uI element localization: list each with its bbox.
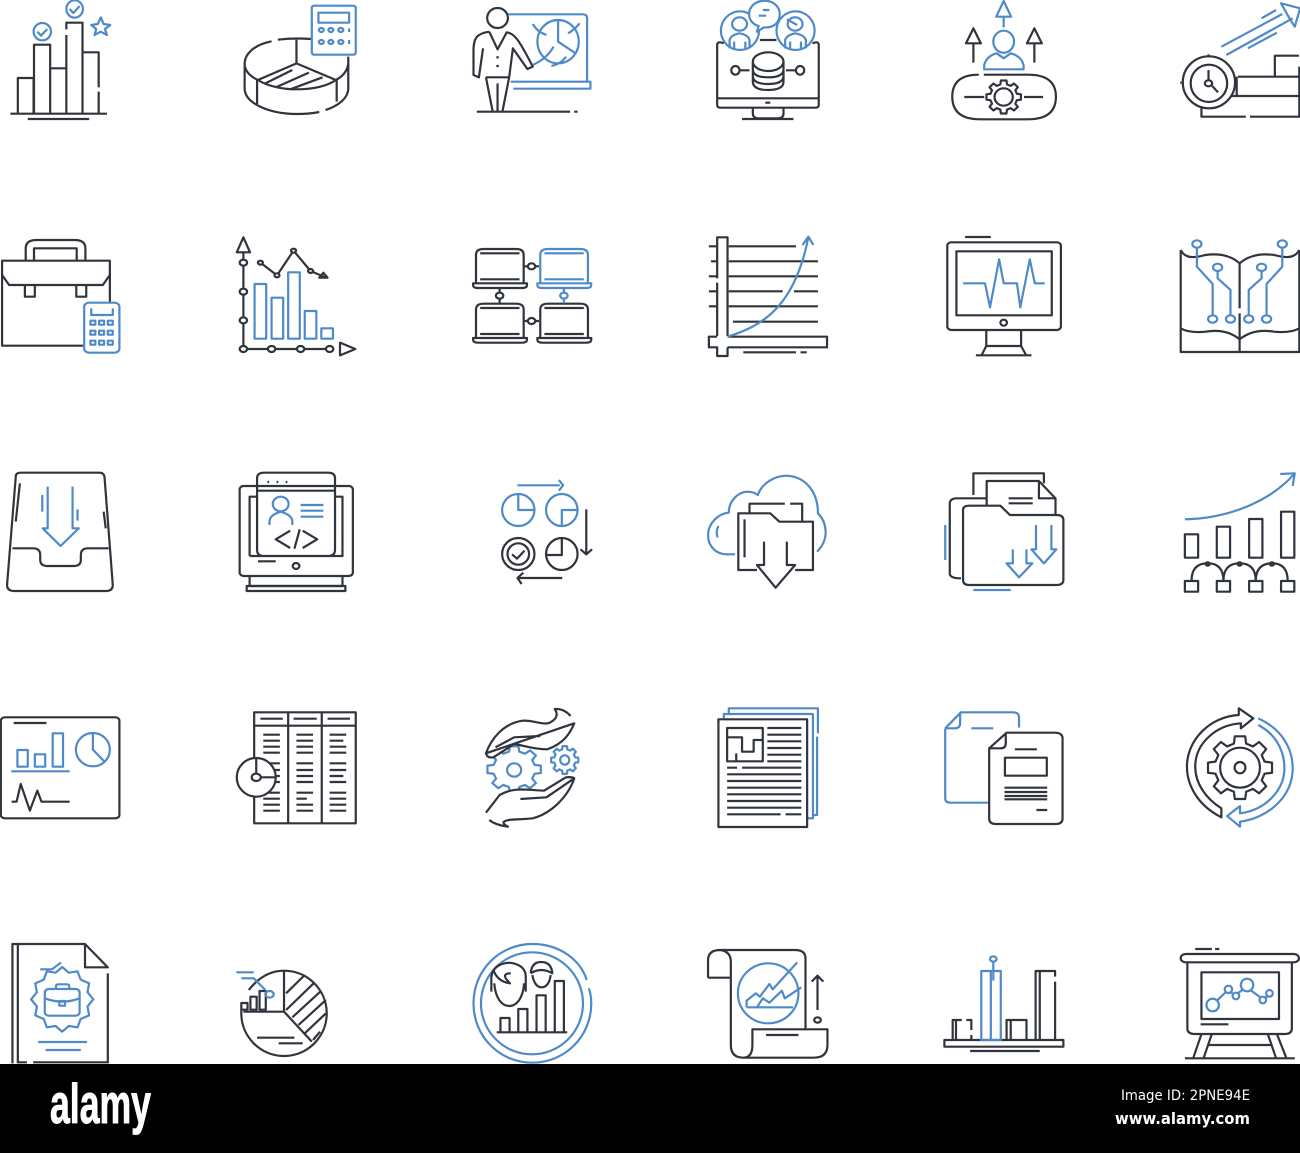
icon: code window on monitor (240, 473, 353, 591)
footer bar (0, 1064, 1300, 1153)
icon: line and bar graph on axes (237, 237, 355, 355)
icon: stacked newspaper (718, 708, 818, 827)
icon: growth curve over ruled chart (709, 237, 827, 356)
icon: dashboard with charts and pulse (1, 717, 119, 818)
icon: clock with steps and rising arrow (1180, 3, 1300, 117)
icon: person on gear with up arrows (952, 1, 1056, 119)
icon: people and bars in circle (474, 944, 591, 1063)
icon: presentation easel (1181, 949, 1299, 1058)
icon: gear with rotation arrows (1187, 708, 1293, 827)
icon: bar graph on platform (944, 956, 1063, 1051)
icon: monitor with heartbeat line (947, 237, 1061, 355)
website url: www.alamy.com (1115, 1109, 1250, 1128)
icon: cycle of pie charts (502, 480, 592, 584)
icon: document with briefcase badge (12, 944, 108, 1063)
icon: hatched pie chart with mini bars (236, 971, 327, 1056)
icon: hands holding gears (486, 709, 578, 827)
icon: pie chart with calculator (245, 6, 356, 114)
icon: scroll with growth chart (708, 950, 827, 1058)
icon: briefcase with calculator (2, 240, 119, 353)
icon: overlapping documents (945, 712, 1063, 824)
icon: database monitor with people (717, 1, 819, 119)
icon: cloud folder download (708, 476, 826, 588)
footer logo: alamy (50, 1072, 151, 1135)
icon: inbox tray with down arrow (7, 473, 113, 591)
icon: folders with down arrows (945, 473, 1063, 590)
image id: Image ID: 2PNE94E (1121, 1088, 1250, 1104)
icon: bar chart with checks and star (10, 0, 110, 119)
icon: open book with circuit traces (1181, 240, 1299, 352)
icon: presenter at whiteboard (474, 8, 590, 112)
icon: networked laptops (473, 249, 591, 343)
icon: bars with rising curve (1185, 473, 1295, 592)
icon: data table with disc chart (237, 712, 356, 823)
